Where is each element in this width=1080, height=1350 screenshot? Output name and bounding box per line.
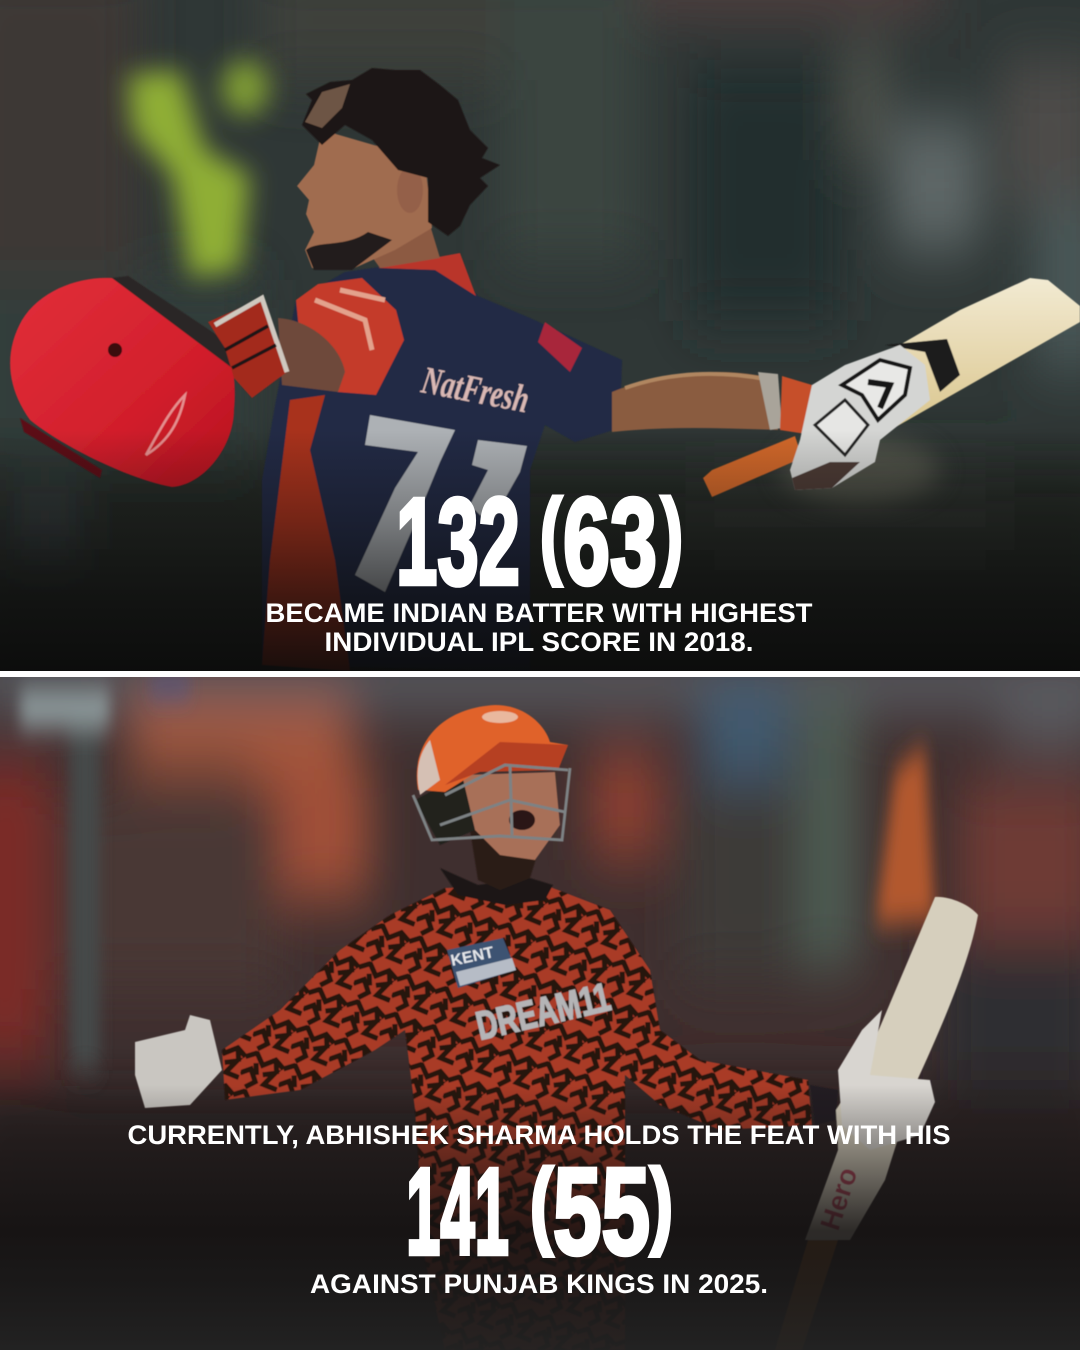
helmet shell <box>417 705 568 792</box>
caption: became Indian batter: BECAME INDIAN BATTER WITH HIGHEST <box>266 598 813 628</box>
helmet vent <box>108 343 122 357</box>
player: Abhishek Sharma <box>135 705 978 1350</box>
sleeve trim <box>538 322 582 372</box>
bat handle <box>703 436 802 497</box>
right arm <box>612 372 778 432</box>
panel: Rishabh Pant 2018 photo <box>0 0 1080 720</box>
stat: 141 (55): ) <box>650 1150 673 1257</box>
right glove <box>838 1010 935 1150</box>
collar <box>440 868 553 905</box>
ear <box>398 172 422 212</box>
stat: 132 (63): ) <box>661 480 683 587</box>
stat: 141 (55): 55 <box>553 1144 650 1281</box>
red collar <box>378 253 476 296</box>
glow around gloved hand <box>780 436 940 504</box>
helmet grille <box>413 765 570 840</box>
bat label: Hero <box>814 1164 863 1234</box>
head <box>297 130 432 270</box>
caption: became Indian batter <box>266 598 813 657</box>
jersey number 77 <box>355 415 527 592</box>
beard <box>306 232 392 270</box>
helmet left strip <box>418 740 440 795</box>
KENT chest badge <box>447 938 516 988</box>
left glove <box>208 298 287 398</box>
watch chain <box>758 372 782 430</box>
helmet side pad <box>415 775 475 845</box>
mouth <box>509 810 535 830</box>
helmet <box>10 278 235 487</box>
bottom dark gradient <box>0 1085 1080 1350</box>
stat: 132 (63): 132 <box>396 474 520 611</box>
panel: Abhishek Sharma 2025 photo <box>0 650 1080 1350</box>
left arm <box>278 318 345 392</box>
bat blade <box>860 278 1080 436</box>
blurred stadium background <box>0 650 1080 1350</box>
helmet peak <box>445 742 568 785</box>
bat sticker <box>885 339 960 392</box>
bat <box>805 897 978 1240</box>
jersey <box>222 885 812 1350</box>
helmet grille <box>112 276 232 368</box>
caption: against Punjab Kings: AGAINST PUNJAB KINGS IN 2025. <box>310 1269 768 1299</box>
caption: became Indian batter: INDIVIDUAL IPL SCORE IN 2018. <box>324 627 754 657</box>
blurred stadium background <box>0 0 1080 720</box>
stat: 132 (63): ( <box>540 480 562 587</box>
red side panel <box>262 395 350 671</box>
left glove <box>135 1015 222 1108</box>
sponsor: NatFresh: NatFresh <box>418 358 533 421</box>
helmet emblem <box>482 711 518 723</box>
DREAM11 sponsor: DREAM11 <box>472 975 615 1049</box>
neck <box>374 228 440 268</box>
right glove <box>790 345 930 490</box>
wristband <box>780 376 812 434</box>
face <box>462 772 560 860</box>
caption: currently Abhishek Sharma: CURRENTLY, ABHISHEK SHARMA HOLDS THE FEAT WITH HIS <box>128 1120 950 1150</box>
jersey <box>262 268 622 632</box>
bottom dark gradient <box>0 430 1080 671</box>
bat handle <box>775 1240 838 1350</box>
hair <box>302 68 500 236</box>
wrist strap <box>810 1085 838 1125</box>
neck and beard <box>470 830 536 890</box>
stat: 141 (55): ( <box>530 1150 553 1257</box>
KENT chest badge: KENT <box>449 944 496 970</box>
red sleeve <box>296 278 404 395</box>
helmet emblem <box>146 395 185 455</box>
stat: 141 (55): 141 <box>406 1144 509 1281</box>
player: Rishabh Pant <box>10 68 1080 671</box>
stat: 132 (63): 63 <box>563 474 657 611</box>
